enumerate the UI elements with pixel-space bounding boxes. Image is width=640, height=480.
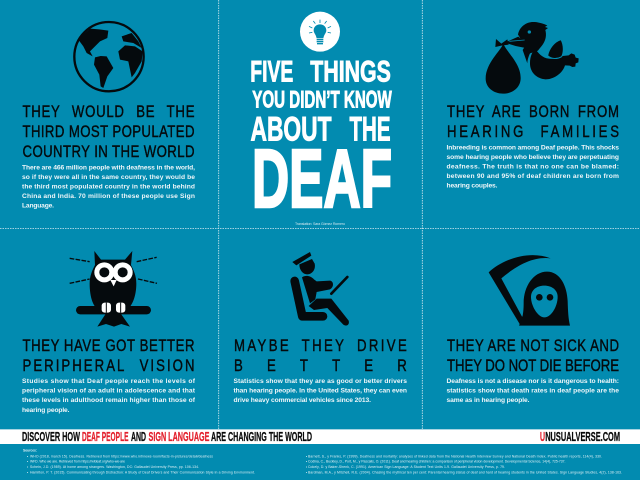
body text: the third most populated country in the world behind bbox=[22, 183, 195, 190]
heading: THEY WOULD BE THE bbox=[22, 103, 195, 121]
heading bbox=[447, 337, 619, 375]
title text: DEAF bbox=[252, 132, 392, 225]
sources: right column: • bbox=[306, 454, 308, 458]
panel: not sick bbox=[446, 255, 619, 404]
heading bbox=[447, 103, 619, 141]
sources: right column: Bardman, M.A., y Mitchell, R.E. (2004). Chasing the mythical ten per cent: Parental hearing status of deaf and hard of hearing students in the United States. Sign Language Studies, 4(2), 138-163. bbox=[308, 471, 622, 475]
heading: THEY HAVE GOT BETTER bbox=[22, 337, 195, 355]
icon: owl on branch bbox=[70, 251, 157, 327]
icon: grim reaper bbox=[489, 255, 570, 326]
heading: COUNTRY IN THE WORLD bbox=[22, 143, 195, 161]
body text: drive heavy commercial vehicles since 2013. bbox=[234, 397, 371, 404]
sources: left column: • bbox=[27, 460, 29, 464]
sources: right column: Barnett, S., y Franks, P. (1999). Deafness and mortality: analyses of linked data from the National Health Interview Survey and National Death Index. Public health reports, 114(4), 330. bbox=[308, 454, 602, 458]
sources: right column bbox=[306, 454, 622, 475]
heading: HEARING FAMILIES bbox=[447, 123, 619, 141]
translation credit: Translation: Sara Gómez Romero bbox=[295, 222, 345, 226]
title text: THE bbox=[350, 110, 390, 148]
body text: so if they were all in the same country, they would be bbox=[22, 174, 195, 181]
body text: Language. bbox=[22, 203, 54, 210]
heading bbox=[22, 337, 195, 375]
sources: right column: • bbox=[306, 471, 308, 475]
banner slogan: SIGN LANGUAGE bbox=[148, 430, 210, 444]
title text: FIVE bbox=[250, 56, 293, 88]
icon: globe bbox=[74, 22, 144, 91]
sources: right column: • bbox=[306, 465, 308, 469]
body text: Statistics show that they are as good or better drivers bbox=[234, 378, 407, 385]
banner slogan: ARE CHANGING THE WORLD bbox=[211, 430, 312, 444]
panel: born from hearing families bbox=[446, 22, 619, 190]
heading: MAYBE THEY DRIVE bbox=[234, 337, 407, 355]
panel: drive better bbox=[234, 252, 407, 404]
body text: hearing couples. bbox=[446, 183, 498, 190]
body text bbox=[234, 378, 407, 404]
sources: left column: • bbox=[27, 465, 29, 469]
icon: driver bbox=[292, 252, 349, 326]
title text bbox=[250, 56, 392, 225]
panel: peripheral vision bbox=[22, 251, 196, 414]
banner slogan: DISCOVER HOW bbox=[22, 430, 80, 444]
sources: left column: Hamilton, P. T. (2015). Communicating through Distraction: A Study of Deaf Drivers and Their Communication Style in a Driving Environment. bbox=[30, 471, 255, 475]
banner slogan: AND bbox=[131, 430, 146, 444]
heading: THEY ARE NOT SICK AND bbox=[447, 337, 619, 355]
title text: THINGS bbox=[310, 56, 391, 88]
sources: left column: • bbox=[27, 471, 29, 475]
sources: right column: Codina, C., Buckley, D., Port, M., y Pascalis, O. (2011). Deaf and hearing children: a comparison of peripheral vision development. Developmental Science, 14(4), 725-737. bbox=[308, 460, 566, 464]
heading: THEY ARE BORN FROM bbox=[447, 103, 619, 121]
body text: hearing people. bbox=[22, 407, 70, 414]
body text: Deafness is not a disease nor is it dangerous to health: bbox=[446, 378, 619, 385]
body text bbox=[22, 164, 195, 210]
body text: Inbreeding is common among Deaf people. This shocks bbox=[446, 144, 619, 151]
title text: YOU DIDN’T KNOW bbox=[252, 87, 392, 114]
body text bbox=[446, 144, 619, 190]
sources: left column: • bbox=[27, 454, 29, 458]
banner slogan: DEAF PEOPLE bbox=[82, 430, 128, 444]
body text: Studies show that Deaf people reach the levels of bbox=[22, 378, 196, 385]
title text: ABOUT bbox=[250, 110, 332, 148]
banner website: U bbox=[540, 430, 545, 444]
body text: peripheral vision of an adult in adolescence and that bbox=[22, 388, 196, 395]
icon: light bulb bbox=[300, 12, 340, 52]
sources: right column: Cokely, D. y Baker-Shenk, C. (1991). American Sign Language: A Student Text Units 1-9. Gallaudet University Press, p. 79. bbox=[308, 465, 505, 469]
body text: China and India. 70 million of these people use Sign bbox=[22, 193, 195, 200]
sources: left column: Schein, J.D. (1989). At home among strangers. Washington, DC: Gallaudet University Press, pp. 106-134. bbox=[30, 465, 199, 469]
body text: statistics show that death rates in deaf people are the bbox=[446, 388, 619, 395]
sources: left column: WHO (2018, march 15). Deafness. Retrieved from https://www.who.int/news-room/facts-in-pictures/detail/deafness bbox=[30, 454, 213, 458]
body text: There are 466 million people with deafness in the world, bbox=[22, 164, 195, 171]
body text: these levels in adulthood remain higher than those of bbox=[22, 397, 196, 404]
panel: third most populated country bbox=[22, 22, 195, 210]
icon: stork with bundle bbox=[486, 22, 579, 94]
heading: BETTER bbox=[234, 357, 407, 375]
banner slogan bbox=[22, 430, 312, 444]
body text: than hearing people. In the United States, they can even bbox=[234, 388, 407, 395]
footer banner bbox=[0, 429, 640, 444]
body text: deafness. The truth is that no one can be blamed: bbox=[446, 163, 619, 170]
sources: left column: Sources: bbox=[23, 448, 37, 452]
body text: between 90 and 95% of deaf children are born from bbox=[446, 173, 619, 180]
panel: title bbox=[250, 12, 392, 226]
sources: right column: • bbox=[306, 460, 308, 464]
body text: same as in hearing people. bbox=[446, 397, 530, 404]
heading bbox=[234, 337, 407, 375]
sources: left column bbox=[23, 448, 255, 475]
sources: left column: WFD. Who we are. Retrieved from https://wfdeaf.org/who-we-are bbox=[30, 460, 125, 464]
heading: PERIPHERAL VISION bbox=[22, 357, 195, 375]
heading: THEY DO NOT DIE BEFORE bbox=[447, 357, 619, 375]
heading bbox=[22, 103, 195, 161]
body text bbox=[446, 378, 619, 404]
body text bbox=[22, 378, 196, 414]
body text: some hearing people who believe they are perpetuating bbox=[446, 154, 619, 161]
heading: THIRD MOST POPULATED bbox=[22, 123, 195, 141]
